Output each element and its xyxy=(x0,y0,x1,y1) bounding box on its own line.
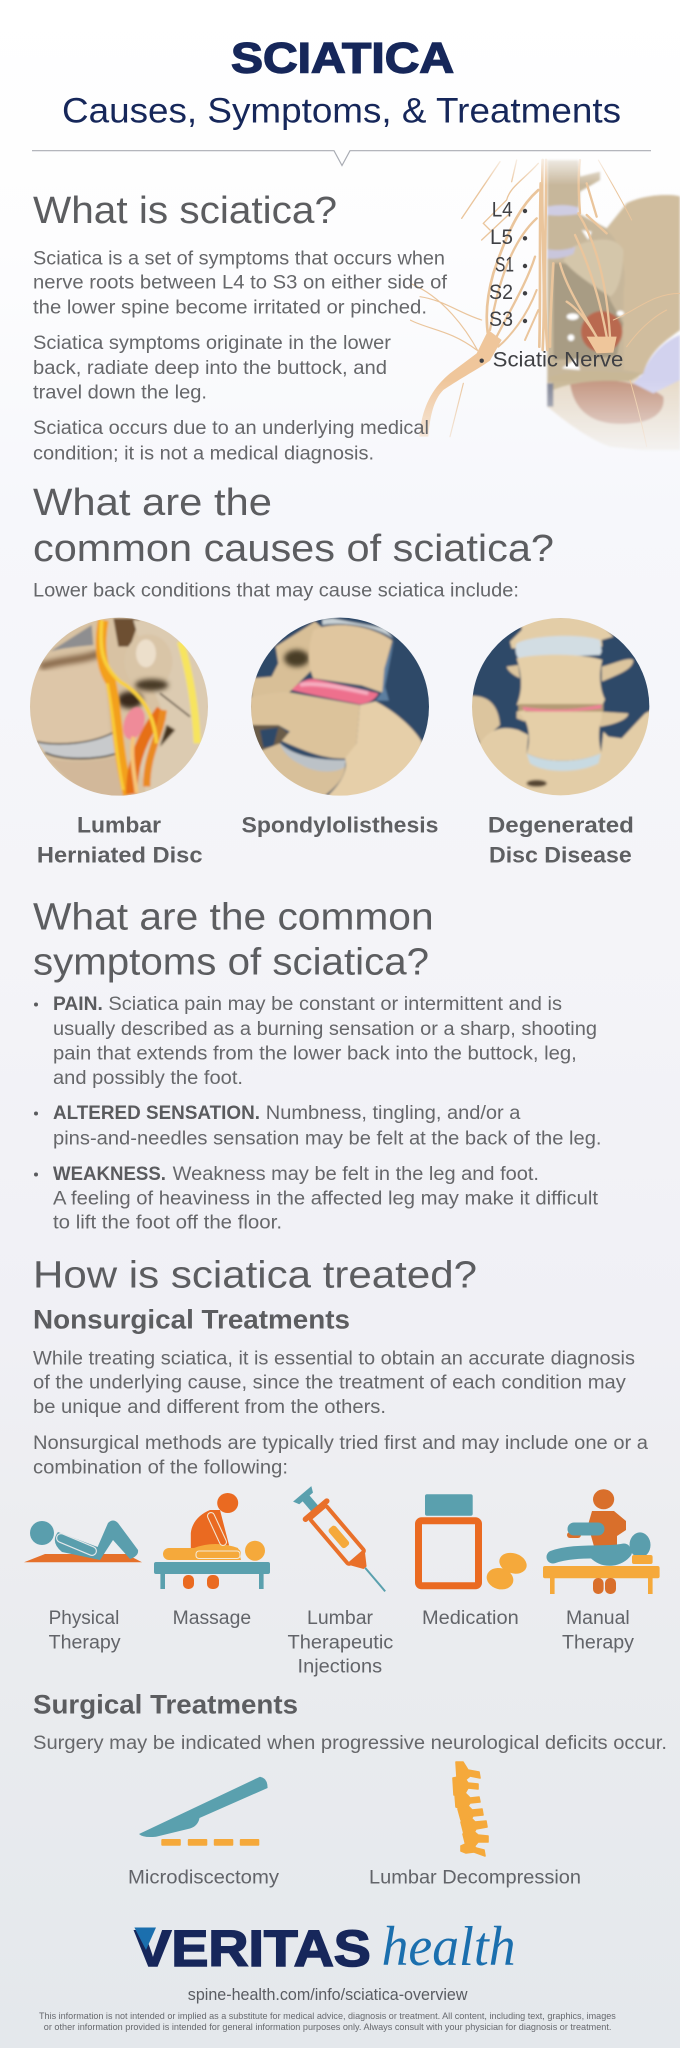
section: how is sciatica treated: How is sciatica treated? xyxy=(33,1254,477,1296)
source url: spine-health.com/info/sciatica-overview xyxy=(188,1985,468,2004)
nerve labels: L4 xyxy=(492,198,513,222)
cause labels: Herniated Disc xyxy=(37,843,203,868)
icon: manual therapy xyxy=(543,1489,660,1594)
section: how is sciatica treated: combination of the following: xyxy=(33,1457,288,1478)
section: what is sciatica: the lower spine become irritated or pinched. xyxy=(33,297,427,318)
section: what is sciatica: Sciatica is a set of symptoms that occurs when xyxy=(33,248,445,270)
cause labels: Degenerated xyxy=(488,813,634,838)
treatment labels: Lumbar xyxy=(307,1608,374,1629)
section: common symptoms: symptoms of sciatica? xyxy=(33,941,429,983)
section: common symptoms: WEAKNESS. xyxy=(53,1164,166,1185)
cause labels xyxy=(37,813,634,868)
disclaimer: or other information provided is intended for general information purposes only. Always consult with your physician for diagnosis or treatment. xyxy=(44,2022,611,2033)
section: common symptoms: Weakness may be felt in the leg and foot. xyxy=(173,1164,539,1185)
treatment labels: Medication xyxy=(422,1608,519,1629)
treatment labels xyxy=(49,1608,635,1678)
nerve labels: S3 xyxy=(489,307,513,331)
logo: Veritas Health xyxy=(134,1916,516,1978)
section: surgical treatments: Surgical Treatments xyxy=(33,1689,298,1719)
treatment labels: Therapeutic xyxy=(288,1633,393,1654)
section: what is sciatica: condition; it is not a medical diagnosis. xyxy=(33,443,374,464)
nerve labels: S2 xyxy=(489,280,513,304)
cause labels: Disc Disease xyxy=(489,843,632,868)
section: surgical treatments: Surgery may be indicated when progressive neurological deficits occur. xyxy=(33,1733,667,1754)
logo: Veritas Health: VERITAS xyxy=(134,1920,371,1977)
cause labels: Spondylolisthesis xyxy=(242,813,438,838)
title: SCIATICA xyxy=(231,35,454,83)
image: lumbar herniated disc xyxy=(27,615,213,798)
section: common symptoms: pain that extends from the lower back into the buttock, leg, xyxy=(53,1043,577,1064)
section: what is sciatica xyxy=(33,190,448,464)
section: how is sciatica treated: Nonsurgical Treatments xyxy=(33,1304,350,1334)
nerve labels: L5 xyxy=(490,225,513,249)
section: common causes: common causes of sciatica? xyxy=(33,528,554,570)
section: what is sciatica: Sciatica occurs due to an underlying medical xyxy=(33,418,429,439)
section: common causes xyxy=(33,482,554,602)
nerve roots and sciatic nerve trunk xyxy=(410,160,680,447)
section: what is sciatica: travel down the leg. xyxy=(33,382,207,403)
treatment labels: Massage xyxy=(173,1608,251,1629)
treatment labels: Therapy xyxy=(49,1633,121,1654)
title xyxy=(62,35,621,131)
cause labels: Lumbar xyxy=(77,813,161,838)
image: spondylolisthesis xyxy=(248,615,435,798)
section: how is sciatica treated: While treating sciatica, it is essential to obtain an accurate diagnosis xyxy=(33,1348,635,1369)
section: common symptoms xyxy=(33,896,602,1233)
disclaimer xyxy=(39,2011,616,2033)
section: what is sciatica: What is sciatica? xyxy=(33,190,337,232)
surgery labels: Microdiscectomy xyxy=(128,1867,280,1888)
section: common symptoms: What are the common xyxy=(33,896,434,938)
nerve labels: S1 xyxy=(495,253,514,277)
icon: physical therapy xyxy=(24,1520,142,1562)
section: how is sciatica treated: be unique and different from the others. xyxy=(33,1397,386,1418)
logo: Veritas Health: health xyxy=(382,1916,516,1978)
surgery labels xyxy=(128,1867,581,1888)
icon: syringe xyxy=(292,1485,396,1600)
section: how is sciatica treated: Nonsurgical methods are typically tried first and may include one or a xyxy=(33,1433,648,1454)
section: common symptoms: Numbness, tingling, and/or a xyxy=(266,1103,521,1124)
section: what is sciatica: Sciatica symptoms originate in the lower xyxy=(33,333,392,354)
section: what is sciatica: back, radiate deep into the buttock, and xyxy=(33,358,387,379)
title: Causes, Symptoms, & Treatments xyxy=(62,92,621,131)
nerve labels xyxy=(480,198,623,372)
section: common symptoms: to lift the foot off the floor. xyxy=(53,1212,282,1233)
icon: medication xyxy=(418,1494,529,1592)
section: how is sciatica treated: of the underlying cause, since the treatment of each condition may xyxy=(33,1373,626,1394)
pelvis and vertebrae xyxy=(547,160,680,450)
treatment labels: Manual xyxy=(566,1608,630,1629)
icon: scalpel xyxy=(139,1777,268,1846)
image: degenerated disc disease xyxy=(468,615,655,798)
illustration: spine, pelvis and sciatic nerve xyxy=(410,160,680,450)
section: common symptoms: and possibly the foot. xyxy=(53,1068,243,1089)
section: common causes: What are the xyxy=(33,482,272,524)
section: how is sciatica treated xyxy=(33,1254,648,1478)
treatment labels: Injections xyxy=(298,1657,382,1678)
nerve labels: Sciatic Nerve xyxy=(493,348,623,372)
treatment labels: Physical xyxy=(49,1608,119,1629)
section: common symptoms: pins-and-needles sensation may be felt at the back of the leg. xyxy=(53,1128,602,1149)
section: common symptoms: A feeling of heaviness in the affected leg may make it difficult xyxy=(53,1188,599,1209)
disclaimer: This information is not intended or implied as a substitute for medical advice, diagnosis or treatment. All content, including text, graphics, images xyxy=(39,2011,616,2022)
icon: lumbar spine xyxy=(453,1762,488,1856)
treatment labels: Therapy xyxy=(562,1633,635,1654)
section: surgical treatments xyxy=(33,1689,667,1754)
section: common symptoms: Sciatica pain may be constant or intermittent and is xyxy=(108,994,562,1015)
section: what is sciatica: nerve roots between L4 to S3 on either side of xyxy=(33,273,448,294)
section: common symptoms: PAIN. xyxy=(53,994,103,1015)
surgery labels: Lumbar Decompression xyxy=(369,1867,581,1888)
icon: massage xyxy=(154,1493,270,1589)
section: common causes: Lower back conditions that may cause sciatica include: xyxy=(33,581,519,602)
section: common symptoms: usually described as a burning sensation or a sharp, shooting xyxy=(53,1019,597,1040)
section: common symptoms: ALTERED SENSATION. xyxy=(53,1103,260,1124)
